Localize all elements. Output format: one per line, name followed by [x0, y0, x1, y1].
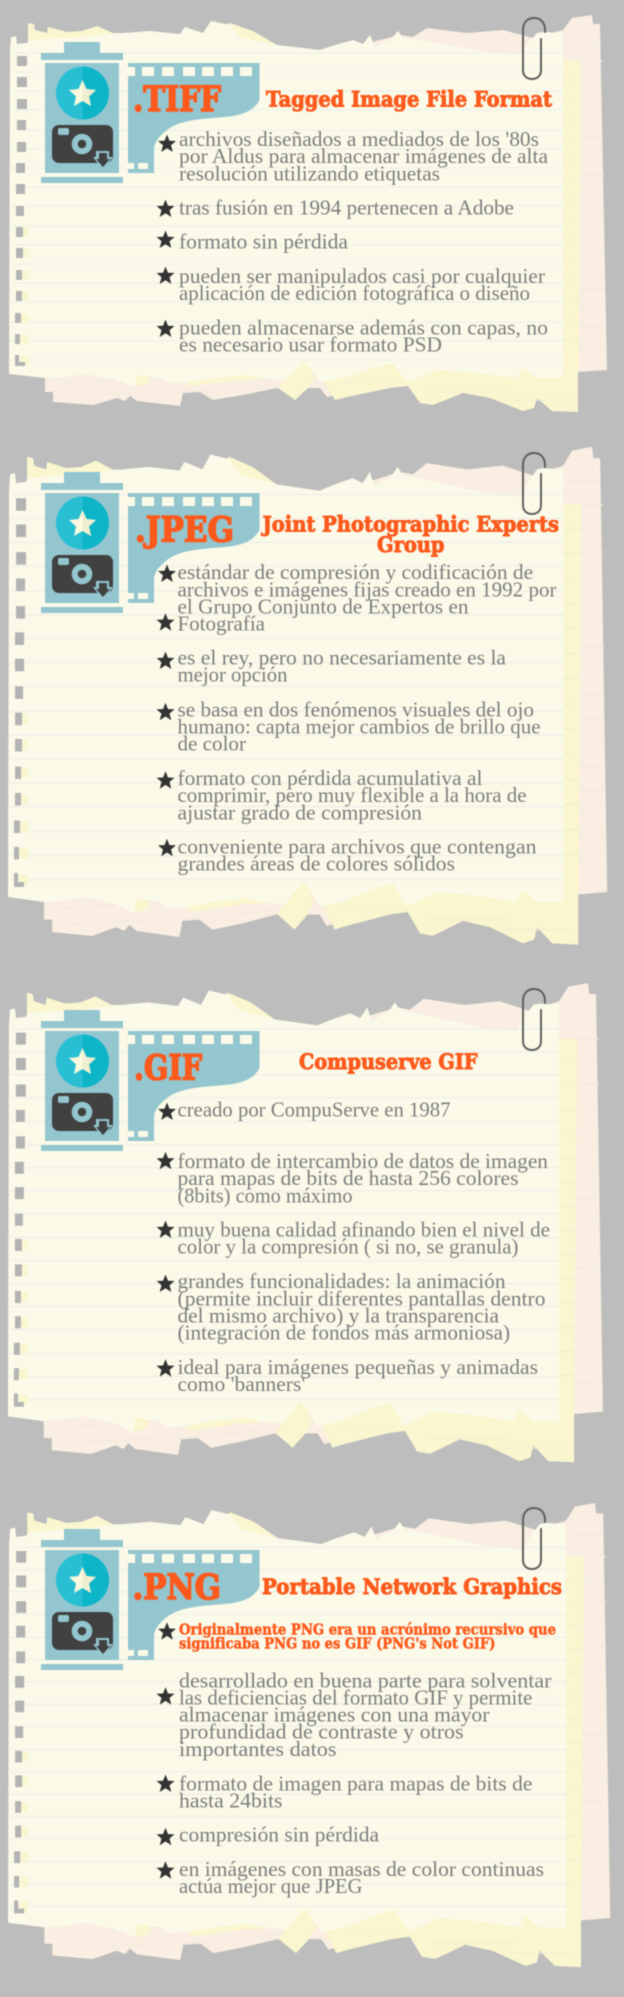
bullet list: PNG: [156, 1621, 556, 1898]
icon: film roll and camera: [41, 42, 260, 183]
bullet: las deficiencias del formato GIF y permite: [179, 1686, 532, 1710]
bullet: estándar de compresión y codificación de: [178, 560, 533, 584]
bullet: mejor opción: [178, 663, 288, 687]
bullet: (8bits) como máximo: [178, 1183, 352, 1207]
heading: Joint Photographic Experts Group: [261, 512, 559, 557]
bullet: formato con pérdida acumulativa al: [178, 766, 483, 790]
bullet list: TIFF: [156, 127, 549, 357]
bullet: [156, 697, 540, 756]
heading: Tagged Image File Format: Tagged Image File Format: [266, 87, 552, 112]
bullet: conveniente para archivos que contengan: [178, 835, 537, 859]
bullet: es el rey, pero no necesariamente es la: [178, 646, 507, 670]
bullet: de color: [178, 732, 246, 756]
bullet: [156, 1149, 549, 1207]
bullet: [156, 1668, 552, 1761]
extension label: .TIFF: .TIFF: [133, 79, 221, 120]
bullet: [156, 1269, 546, 1345]
icon: paperclip: [523, 989, 545, 1050]
bullet: [156, 1218, 550, 1259]
extension label: .JPEG: .JPEG: [135, 510, 234, 551]
bullet: [156, 1355, 538, 1396]
highlighted bullet: [158, 1621, 556, 1652]
bullet: [156, 560, 556, 636]
torn paper sheets: PNG: [8, 1503, 610, 1967]
torn paper sheets: GIF: [8, 983, 603, 1462]
bullet: formato de intercambio de datos de imagen: [178, 1149, 549, 1173]
bullet: desarrollado en buena parte para solventar: [179, 1668, 552, 1692]
bullet: archivos e imágenes fijas creado en 1992 por: [178, 577, 556, 601]
bullet: color y la compresión ( si no, se granula): [178, 1235, 518, 1259]
bullet: muy buena calidad afinando bien el nivel de: [178, 1218, 550, 1242]
bullet: (permite incluir diferentes pantallas dentro: [178, 1286, 546, 1310]
bullet: actúa mejor que JPEG: [179, 1874, 362, 1898]
heading: Joint Photographic Experts Group: Group: [377, 532, 444, 557]
icon: film roll and camera: [41, 472, 260, 613]
torn paper sheets: TIFF: [9, 15, 607, 412]
bullet: [156, 646, 507, 687]
bullet: comprimir, pero muy flexible a la hora de: [178, 783, 526, 807]
bullet: [158, 127, 549, 186]
bullet: [156, 766, 526, 824]
bullet: hasta 24bits: [179, 1788, 282, 1812]
panel: TIFF: [9, 15, 607, 412]
bullet: creado por CompuServe en 1987: [178, 1098, 450, 1122]
icon: paperclip: [523, 1508, 545, 1569]
highlighted bullet: significaba PNG no es GIF (PNG's Not GIF): [179, 1635, 495, 1652]
bullet: formato de imagen para mapas de bits de: [179, 1771, 532, 1795]
bullet: como 'banners': [178, 1372, 305, 1396]
heading: Joint Photographic Experts Group: Joint Photographic Experts: [261, 512, 559, 537]
bullet: almacenar imágenes con una mayor: [179, 1703, 490, 1727]
bullet: humano: capta mejor cambios de brillo que: [178, 714, 540, 738]
bullet: [156, 1857, 544, 1898]
bullet: Fotografía: [178, 612, 266, 636]
bullet: resolución utilizando etiquetas: [179, 162, 440, 186]
bullet: en imágenes con masas de color continuas: [179, 1857, 544, 1881]
bullet: pueden ser manipulados casi por cualquier: [179, 264, 545, 288]
torn paper sheets: JPEG: [8, 447, 607, 945]
bullet: archivos diseñados a mediados de los '80s: [179, 127, 539, 151]
bullet: [158, 835, 537, 876]
heading: Portable Network Graphics: Portable Network Graphics: [262, 1574, 562, 1599]
bullet: [156, 264, 545, 305]
bullet: [156, 316, 548, 357]
extension label: .PNG: .PNG: [132, 1567, 221, 1608]
icon: paperclip: [523, 18, 545, 79]
bullet: tras fusión en 1994 pertenecen a Adobe: [179, 196, 514, 220]
bullet: profundidad de contraste y otros: [179, 1720, 464, 1744]
bullet: por Aldus para almacenar imágenes de alta: [179, 144, 549, 168]
panel: GIF: [8, 983, 603, 1462]
icon: film roll and camera: [41, 1010, 260, 1151]
extension label: .GIF: .GIF: [134, 1047, 202, 1088]
bullet: pueden almacenarse además con capas, no: [179, 316, 548, 340]
bullet: ideal para imágenes pequeñas y animadas: [178, 1355, 538, 1379]
bullet: importantes datos: [179, 1737, 337, 1761]
icon: paperclip: [523, 453, 545, 514]
bullet: para mapas de bits de hasta 256 colores: [178, 1166, 518, 1190]
bullet: del mismo archivo) y la transparencia: [178, 1303, 500, 1327]
icon: film roll and camera: [41, 1529, 260, 1670]
bullet list: GIF: [156, 1098, 550, 1396]
bullet: el Grupo Conjunto de Expertos en: [178, 594, 469, 618]
bullet: aplicación de edición fotográfica o diseño: [179, 281, 530, 305]
highlighted bullet: Originalmente PNG era un acrónimo recursivo que: [179, 1621, 556, 1638]
bullet: es necesario usar formato PSD: [179, 333, 442, 357]
bullet list: JPEG: [156, 560, 556, 876]
bullet: ajustar grado de compresión: [178, 800, 423, 824]
bullet: [156, 1771, 532, 1812]
bullet: grandes funcionalidades: la animación: [178, 1269, 506, 1293]
bullet: grandes áreas de colores sólidos: [178, 852, 455, 876]
bullet: se basa en dos fenómenos visuales del ojo: [178, 697, 534, 721]
bullet: formato sin pérdida: [179, 230, 349, 254]
bullet: compresión sin pérdida: [179, 1823, 380, 1847]
panel: JPEG: [8, 447, 607, 945]
panel: PNG: [8, 1503, 610, 1967]
bullet: (integración de fondos más armoniosa): [178, 1321, 510, 1345]
heading: Compuserve GIF: Compuserve GIF: [299, 1049, 478, 1074]
